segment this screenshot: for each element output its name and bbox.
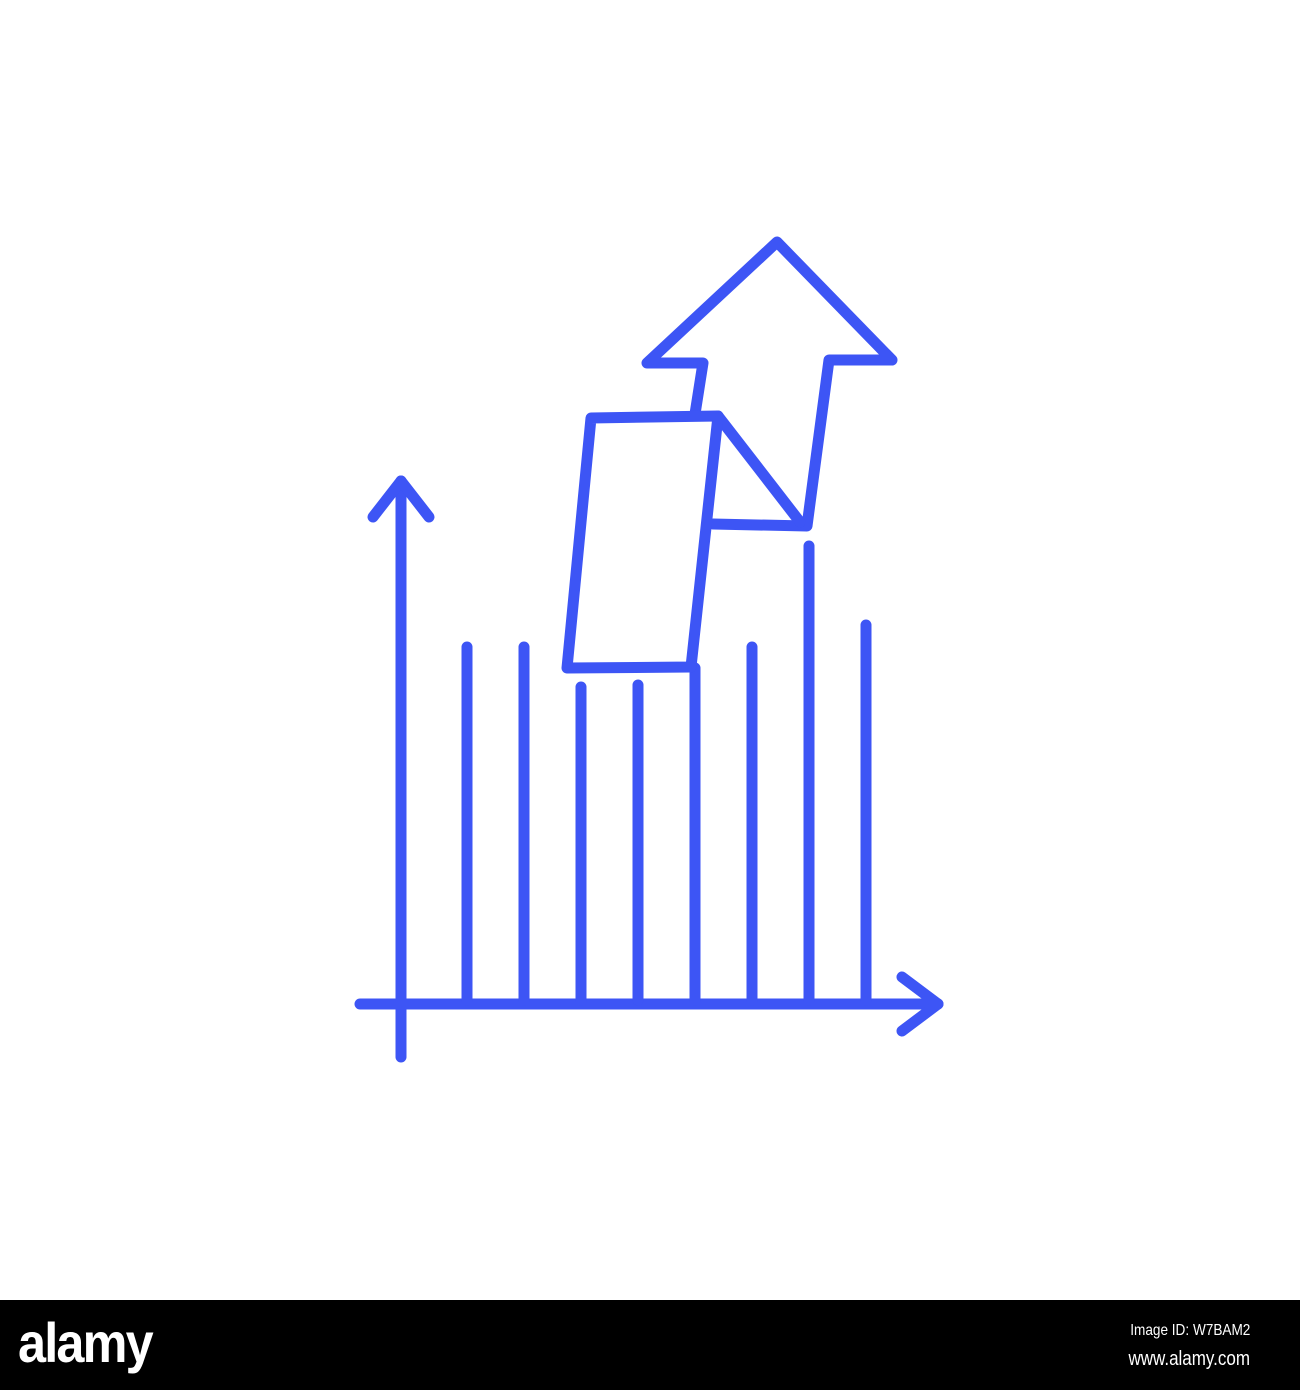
tilted rectangle bbox=[567, 416, 718, 668]
image id: Image ID: W7BAM2 bbox=[1130, 1322, 1250, 1339]
x axis bbox=[360, 977, 938, 1031]
rising arrow bbox=[647, 242, 892, 526]
footer bar bbox=[0, 1300, 1300, 1390]
url: www.alamy.com bbox=[1128, 1348, 1250, 1370]
bars bbox=[467, 546, 866, 1000]
y axis bbox=[373, 481, 429, 1057]
logo text: alamy bbox=[18, 1311, 152, 1374]
